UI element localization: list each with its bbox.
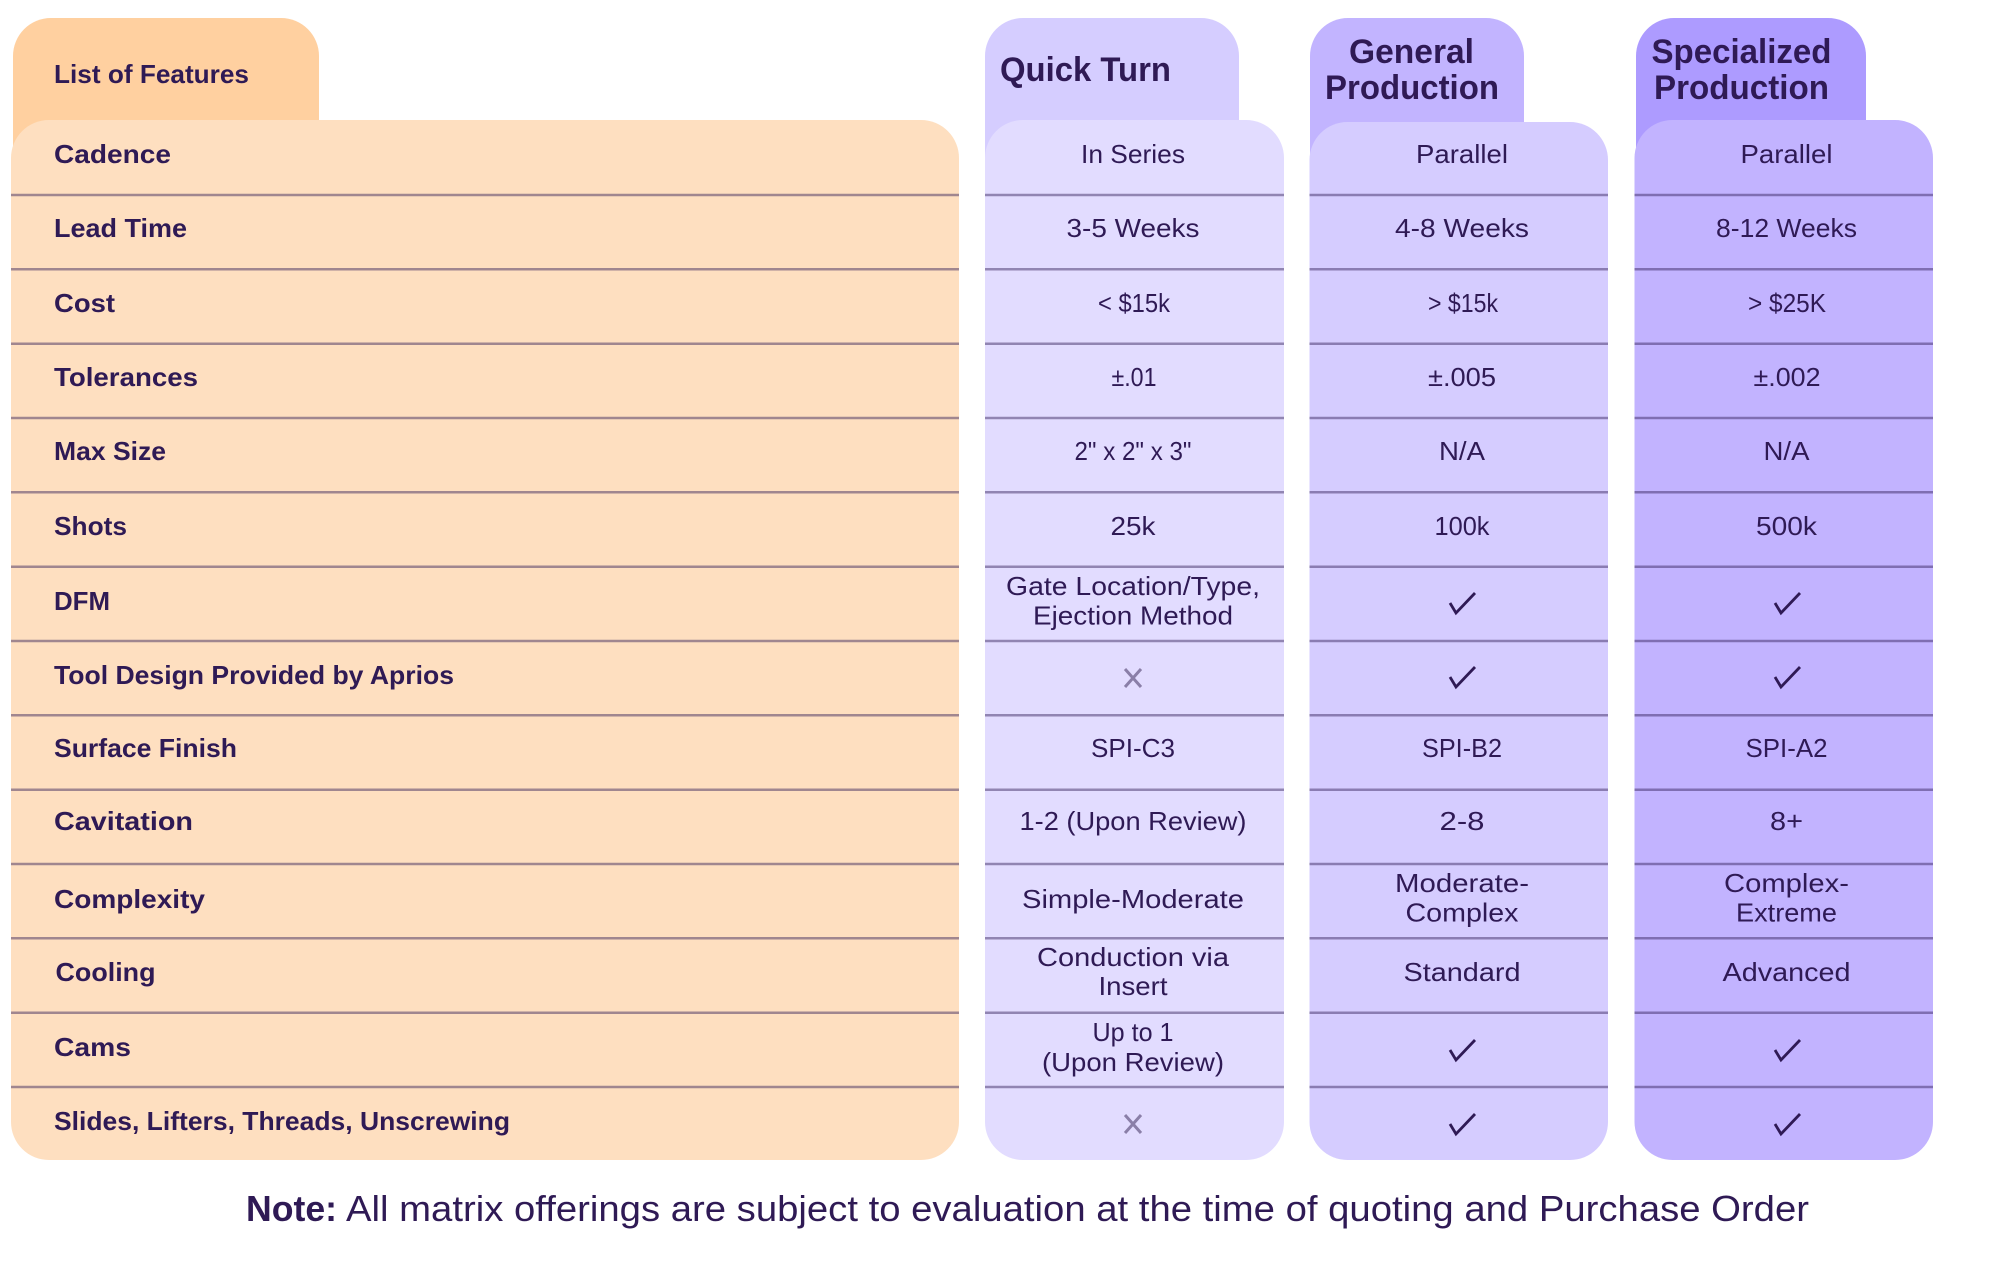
feature: cost: Cost — [54, 288, 115, 318]
tab: specialized production: Production — [1654, 69, 1829, 107]
icon: cross — [1125, 669, 1141, 687]
footnote: All matrix offerings are subject to evaluation at the time of quoting and Purchase Order — [346, 1188, 1809, 1229]
icon: check — [1450, 593, 1475, 613]
value: dfm — [1006, 571, 1260, 630]
value: max size: N/A — [1764, 436, 1810, 466]
value: cost: < $15k — [1098, 288, 1171, 318]
specialized production panel background — [1634, 120, 1933, 1160]
icon: check — [1450, 667, 1475, 687]
value: cooling: Standard — [1404, 957, 1520, 987]
feature: tool design: Tool Design Provided by Aprios — [54, 660, 454, 690]
feature: slides, lifters, threads, unscrewing: Slides, Lifters, Threads, Unscrewing — [54, 1106, 510, 1136]
feature panel background — [11, 120, 959, 1160]
value: max size: N/A — [1439, 436, 1486, 466]
icon: check — [1775, 1040, 1800, 1060]
tab: general production: Production — [1325, 69, 1499, 107]
panel: specialized production — [1634, 18, 1933, 1160]
feature: cadence: Cadence — [54, 139, 171, 169]
value: cams: (Upon Review) — [1042, 1047, 1224, 1077]
tab: quick turn: Quick Turn — [1000, 51, 1171, 89]
value: cost: > $25K — [1748, 288, 1827, 318]
feature: complexity: Complexity — [54, 884, 206, 914]
icon: check — [1775, 1114, 1800, 1134]
icon: check — [1450, 1114, 1475, 1134]
value: lead time: 3-5 Weeks — [1066, 213, 1200, 243]
icon: check — [1775, 593, 1800, 613]
value: shots: 100k — [1434, 511, 1490, 541]
value: tolerances: ±.002 — [1754, 362, 1820, 392]
value: tolerances: ±.005 — [1428, 362, 1496, 392]
tab: list of features: List of Features — [54, 59, 249, 89]
value: cadence: Parallel — [1416, 139, 1508, 169]
footnote: Note: — [246, 1188, 337, 1229]
tab: quick turn — [985, 18, 1239, 228]
value: complexity: Moderate- — [1395, 868, 1529, 898]
tab: specialized production — [1636, 18, 1866, 228]
value: complexity — [1395, 868, 1529, 928]
tab: general production — [1310, 18, 1524, 228]
panel: list of features — [11, 18, 959, 1160]
value: cadence: In Series — [1081, 139, 1185, 169]
feature: cavitation: Cavitation — [54, 806, 193, 836]
value: dfm: Ejection Method — [1033, 600, 1233, 630]
value: lead time: 8-12 Weeks — [1716, 213, 1857, 243]
feature: surface finish: Surface Finish — [54, 733, 237, 763]
icon: check — [1775, 667, 1800, 687]
value: max size: 2" x 2" x 3" — [1074, 436, 1192, 466]
panel: general production — [1310, 18, 1608, 1160]
value: cavitation: 1-2 (Upon Review) — [1020, 806, 1246, 836]
value: cooling: Advanced — [1722, 957, 1850, 987]
value: cooling: Conduction via — [1037, 942, 1230, 972]
value: complexity: Complex — [1406, 898, 1518, 928]
value: dfm: Gate Location/Type, — [1006, 571, 1260, 601]
feature: dfm: DFM — [54, 586, 110, 616]
feature: cooling: Cooling — [56, 957, 156, 987]
tab: specialized production: Specialized — [1652, 33, 1832, 71]
icon: cross — [1125, 1115, 1141, 1133]
general production panel background — [1310, 122, 1608, 1160]
value: surface finish: SPI-C3 — [1091, 733, 1175, 763]
quick turn panel background — [985, 120, 1284, 1160]
value: tolerances: ±.01 — [1112, 362, 1156, 392]
value: cooling: Insert — [1098, 971, 1168, 1001]
feature: cams: Cams — [54, 1032, 131, 1062]
value: cams: Up to 1 — [1092, 1017, 1174, 1047]
value: complexity: Complex- — [1724, 868, 1849, 898]
value: cavitation: 2-8 — [1440, 806, 1484, 836]
value: surface finish: SPI-B2 — [1422, 733, 1502, 763]
tab: general production: General — [1349, 33, 1474, 71]
feature: lead time: Lead Time — [54, 213, 187, 243]
value: shots: 25k — [1110, 511, 1157, 541]
value: complexity — [1724, 868, 1849, 928]
value: cost: > $15k — [1428, 288, 1499, 318]
value: lead time: 4-8 Weeks — [1395, 213, 1529, 243]
value: cooling — [1037, 942, 1230, 1001]
feature: max size: Max Size — [54, 436, 166, 466]
value: cadence: Parallel — [1740, 139, 1832, 169]
feature: tolerances: Tolerances — [54, 362, 198, 392]
icon: check — [1450, 1040, 1475, 1060]
tab: list of features — [13, 18, 319, 228]
feature: shots: Shots — [54, 511, 127, 541]
value: complexity: Simple-Moderate — [1022, 884, 1244, 914]
value: shots: 500k — [1756, 511, 1818, 541]
value: cams — [1042, 1017, 1224, 1077]
value: complexity: Extreme — [1736, 898, 1837, 928]
value: cavitation: 8+ — [1770, 806, 1803, 836]
value: surface finish: SPI-A2 — [1746, 733, 1828, 763]
panel: quick turn — [985, 18, 1284, 1160]
